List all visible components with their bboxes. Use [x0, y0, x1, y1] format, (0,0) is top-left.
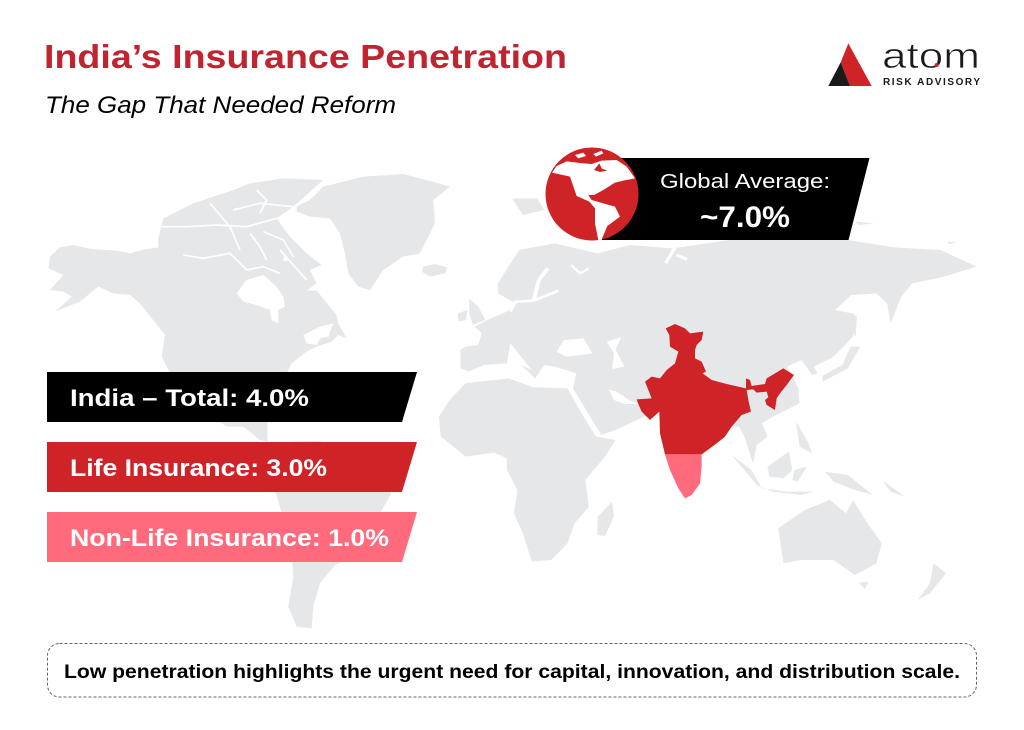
Americas and Canadian Arctic [48, 174, 450, 628]
stat bar: India total [47, 372, 417, 422]
callout label: Global Average: [660, 171, 830, 193]
logo mark [828, 43, 872, 86]
world map background [48, 174, 976, 628]
subtitle: The Gap That Needed Reform [45, 92, 396, 119]
stat bar: non-life insurance [47, 512, 417, 562]
stat bar: non-life insurance: Non-Life Insurance: 1.0% [70, 525, 389, 552]
stat bar: life insurance: Life Insurance: 3.0% [70, 455, 327, 482]
India northern region, life insurance [637, 324, 794, 454]
India southern region, non-life insurance [665, 454, 702, 498]
footer callout [48, 644, 976, 697]
logo tagline: RISK ADVISORY [883, 77, 980, 88]
callout value: ~7.0% [700, 201, 790, 234]
icon: globe [546, 148, 638, 240]
callout banner [602, 158, 870, 240]
logo wordmark: atom [882, 35, 980, 76]
logo: atom risk advisory [828, 35, 980, 88]
map highlight: India [637, 324, 794, 498]
Africa, Madagascar, Southeast Asia and Oceania [439, 378, 946, 600]
footer callout: Low penetration highlights the urgent need for capital, innovation, and distribution scale. [64, 661, 960, 683]
logo dot [935, 63, 939, 67]
stat bar: life insurance [47, 442, 417, 492]
callout: global average [546, 148, 870, 240]
stat bar: India total: India – Total: 4.0% [70, 385, 309, 412]
title: India’s Insurance Penetration [44, 38, 567, 75]
Europe and Asia [458, 198, 976, 463]
